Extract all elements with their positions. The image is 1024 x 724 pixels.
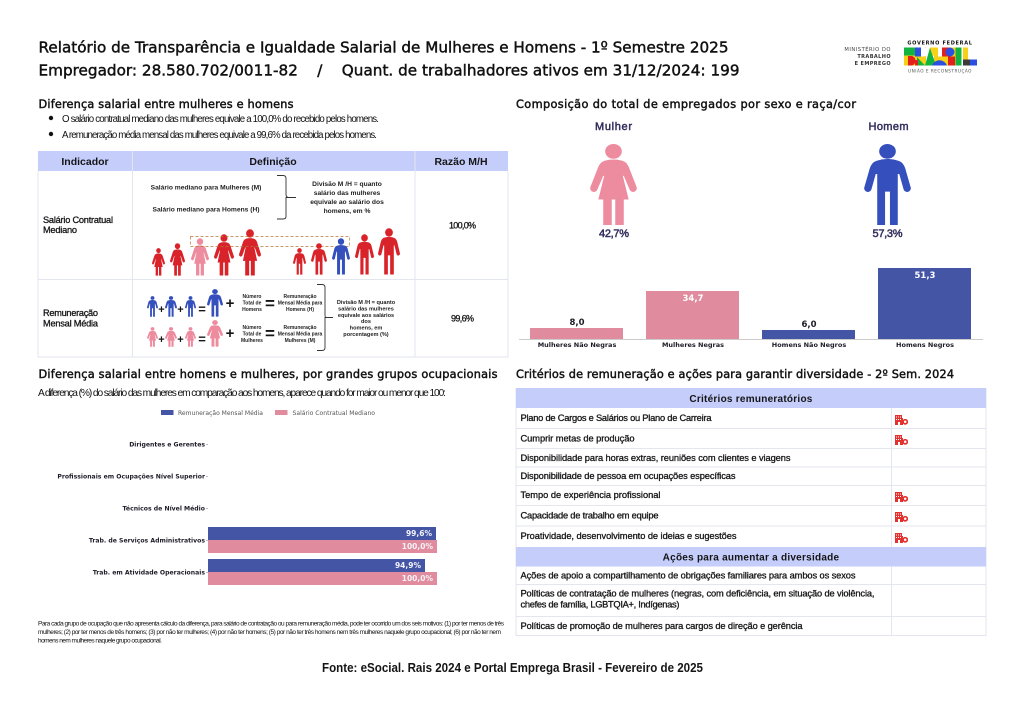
row: salário contratual mediano: Salário Contratual: [43, 215, 113, 225]
icons: mulheres ordenadas por salário: [152, 229, 261, 276]
footnote: Para cada grupo de ocupação que não apresenta cálculo da diferença, para salário de contratação ou para remuneração média, pode ter ocorrido um dos seis motivos: (1) por ter menos de três: [38, 620, 505, 628]
formula: mulheres: +: [226, 325, 235, 342]
icon: homem 57,3%: 57,3%: [872, 228, 903, 240]
formula: mulheres: Mensal Média para: [278, 332, 322, 338]
logo: Ministério do Trabalho e Emprego / Governo Federal: MINISTÉRIO DO: [844, 45, 891, 53]
bullets: O salário contratual mediano das mulheres equivale a 100,0% do recebido pelos homens.: [62, 114, 379, 125]
criteria rows: Tempo de experiência profissional: [520, 490, 660, 500]
action rows: Políticas de promoção de mulheres para cargos de direção e gerência: [520, 621, 803, 631]
header: critérios remuneratórios: [516, 388, 986, 408]
formula: homens: +: [226, 295, 235, 312]
logo: Ministério do Trabalho e Emprego / Governo Federal: [844, 40, 977, 74]
formula: mulheres: +: [158, 334, 165, 346]
formula: mulheres: =: [198, 332, 206, 346]
formula: mulheres: Mulheres: [241, 338, 263, 344]
heading: critérios: Critérios de remuneração e ações para garantir diversidade - 2º Sem. 2024: [516, 368, 954, 381]
criteria rows: Capacidade de trabalho em equipe: [520, 510, 658, 520]
bar chart: composição: Mulheres Negras: [662, 341, 724, 349]
formula: homens: =: [198, 302, 206, 316]
criteria rows: [520, 413, 791, 541]
formula: homens: Mensal Média para: [278, 300, 322, 306]
bar chart: grupos ocupacionais: 100,0%: [402, 542, 433, 551]
row: salário contratual mediano: Mediano: [43, 225, 77, 235]
header: critérios remuneratórios: Critérios remuneratórios: [689, 394, 813, 405]
bar chart: grupos ocupacionais: Profissionais em Ocupações Nível Superior: [57, 472, 205, 480]
bar chart: grupos ocupacionais: 100,0%: [402, 574, 433, 583]
formula: homens: Remuneração: [283, 294, 317, 300]
definition: salário mediano: homens, em %: [324, 208, 370, 215]
table header: [38, 151, 508, 171]
heading: grupos ocupacionais: Diferença salarial entre homens e mulheres, por grandes grupos ocupacionais: [38, 368, 498, 381]
action rows: Políticas de contratação de mulheres (negras, com deficiência, em situação de violência,: [520, 588, 874, 598]
formula: homens: =: [265, 294, 275, 313]
brace and division text: equivale aos salários: [338, 313, 394, 319]
formula: homens: Homens (H): [286, 307, 314, 313]
bar chart: grupos ocupacionais: [57, 442, 437, 585]
formula: mulheres: Mulheres (M): [285, 338, 316, 344]
footnote: [38, 620, 505, 644]
legend: Remuneração Mensal Média: [178, 409, 263, 417]
bar chart: composição: 8,0: [569, 318, 585, 328]
bar chart: composição: Homens Não Negros: [772, 341, 846, 349]
criteria rows: Disponibilidade de pessoa em ocupações específicas: [520, 471, 736, 481]
formula: homens: [147, 289, 322, 317]
bar chart: grupos ocupacionais: Trab. em Atividade Operacionais: [93, 570, 205, 576]
formula: mulheres: =: [265, 324, 275, 343]
formula: homens: Total de: [243, 300, 262, 306]
logo: Ministério do Trabalho e Emprego / Governo Federal: UNIÃO E RECONSTRUÇÃO: [908, 68, 972, 74]
panel: critérios table: [516, 388, 986, 636]
icon: mulher 42,7%: Mulher: [595, 121, 632, 133]
brace and division text: porcentagem (%): [343, 332, 389, 338]
formula: mulheres: +: [177, 334, 184, 346]
formula: homens: +: [177, 304, 184, 316]
criteria rows: Disponibilidade para horas extras, reuniões com clientes e viagens: [520, 453, 791, 463]
action rows: chefes de família, LGBTQIA+, Indígenas): [520, 600, 680, 610]
logo: Ministério do Trabalho e Emprego / Governo Federal: E EMPREGO: [855, 61, 891, 67]
bar chart: composição: 51,3: [915, 271, 936, 281]
title: Relatório de Transparência e Igualdade Salarial de Mulheres e Homens - 1º Semestre 2025: [38, 38, 728, 56]
definition: salário mediano: Salário mediano para Mulheres (M): [151, 184, 261, 192]
icons: homens ordenados por salário: [293, 228, 400, 275]
bar chart: composição: Homens Negros: [896, 341, 954, 349]
action rows: [520, 570, 874, 631]
footnote: homens nem mulheres naquele grupo ocupacional.: [38, 638, 162, 644]
table header: Razão M/H: [434, 156, 488, 168]
title: Empregador: 28.580.702/0011-82 / Quant. de trabalhadores ativos em 31/12/2024: 199: [38, 62, 740, 80]
icon: homem 57,3%: Homem: [868, 121, 908, 133]
bar chart: grupos ocupacionais: 99,6%: [406, 529, 432, 538]
definition: salário mediano: Divisão M /H = quanto: [312, 181, 382, 188]
action rows: Ações de apoio a compartilhamento de obrigações familiares para ambos os sexos: [520, 570, 856, 580]
definition: salário mediano: Salário mediano para Homens (H): [152, 206, 260, 214]
formula: mulheres: Número: [243, 325, 261, 331]
bar chart: grupos ocupacionais: Técnicos de Nível Médio: [123, 504, 205, 512]
criteria rows: Cumprir metas de produção: [520, 434, 634, 444]
table header: Indicador: [61, 156, 109, 168]
bar chart: composição: [519, 268, 983, 349]
criteria rows: Plano de Cargos e Salários ou Plano de Carreira: [520, 413, 712, 423]
logo: Ministério do Trabalho e Emprego / Governo Federal: TRABALHO: [857, 54, 891, 60]
header: ações: Ações para aumentar a diversidade: [663, 552, 840, 564]
source: Fonte: eSocial. Rais 2024 e Portal Emprega Brasil - Fevereiro de 2025: [322, 660, 703, 675]
formula: homens: Homens: [242, 307, 262, 313]
brace and division text: Divisão M /H = quanto: [337, 300, 396, 306]
footnote: mulheres; (2) por ter menos de três homens; (3) por não ter mulheres; (4) por não ter homens; (5) por não ter três homens nem três mulheres naquele grupo ocupacional; (6) por não ter nem: [38, 629, 501, 636]
bar chart: grupos ocupacionais: Trab. de Serviços Administrativos: [89, 538, 205, 544]
definition: salário mediano: [151, 176, 384, 219]
logo: Ministério do Trabalho e Emprego / Governo Federal: GOVERNO FEDERAL: [907, 40, 973, 46]
formula: mulheres: [147, 320, 322, 347]
bar chart: grupos ocupacionais: 94,9%: [395, 561, 421, 570]
bullets: A remuneração média mensal das mulheres equivale a 99,6% da recebida pelos homens.: [62, 130, 377, 141]
bar chart: composição: Mulheres Não Negras: [538, 341, 616, 349]
row: remuneração mensal média: 99,6%: [451, 314, 474, 324]
criteria rows: Proatividade, desenvolvimento de ideias e sugestões: [520, 531, 737, 541]
icon: mulher 42,7%: 42,7%: [599, 228, 629, 240]
formula: homens: Número: [243, 294, 261, 300]
heading: diferença salarial: Diferença salarial entre mulheres e homens: [38, 98, 294, 111]
bar chart: composição: 34,7: [683, 294, 704, 304]
brace and division text: [317, 284, 396, 350]
row: remuneração mensal média: Remuneração: [43, 308, 98, 318]
panel: tabela indicadores: [38, 151, 508, 357]
text: nota da diferença: A diferença (%) do salário das mulheres em comparação aos homens, aparece quando for maior ou menor que 100:: [38, 388, 446, 399]
title: [38, 38, 740, 80]
heading: composição: Composição do total de empregados por sexo e raça/cor: [516, 98, 856, 111]
definition: salário mediano: equivale ao salário dos: [310, 199, 384, 206]
bullets: [49, 114, 379, 141]
formula: mulheres: Remuneração: [283, 325, 317, 331]
legend: Salário Contratual Mediano: [292, 409, 375, 417]
definition: salário mediano: salário das mulheres: [314, 190, 381, 197]
brace and division text: homens, em: [350, 326, 382, 332]
formula: mulheres: Total de: [243, 332, 262, 338]
bar chart: grupos ocupacionais: Dirigentes e Gerentes: [129, 442, 205, 448]
brace and division text: salário das mulheres: [338, 306, 394, 312]
icons: critérios marcados: [895, 415, 907, 543]
formula: homens: +: [158, 304, 165, 316]
header: ações: [516, 547, 986, 566]
icon: mulher 42,7%: [590, 121, 637, 240]
table header: Definição: [249, 156, 297, 168]
row: remuneração mensal média: Mensal Média: [43, 318, 99, 328]
icon: homem 57,3%: [864, 121, 911, 240]
row: salário contratual mediano: [43, 215, 476, 235]
bar chart: composição: 6,0: [801, 320, 817, 330]
row: remuneração mensal média: [43, 308, 474, 328]
legend: [161, 409, 375, 417]
brace and division text: dos: [361, 319, 371, 325]
row: salário contratual mediano: 100,0%: [449, 220, 476, 230]
